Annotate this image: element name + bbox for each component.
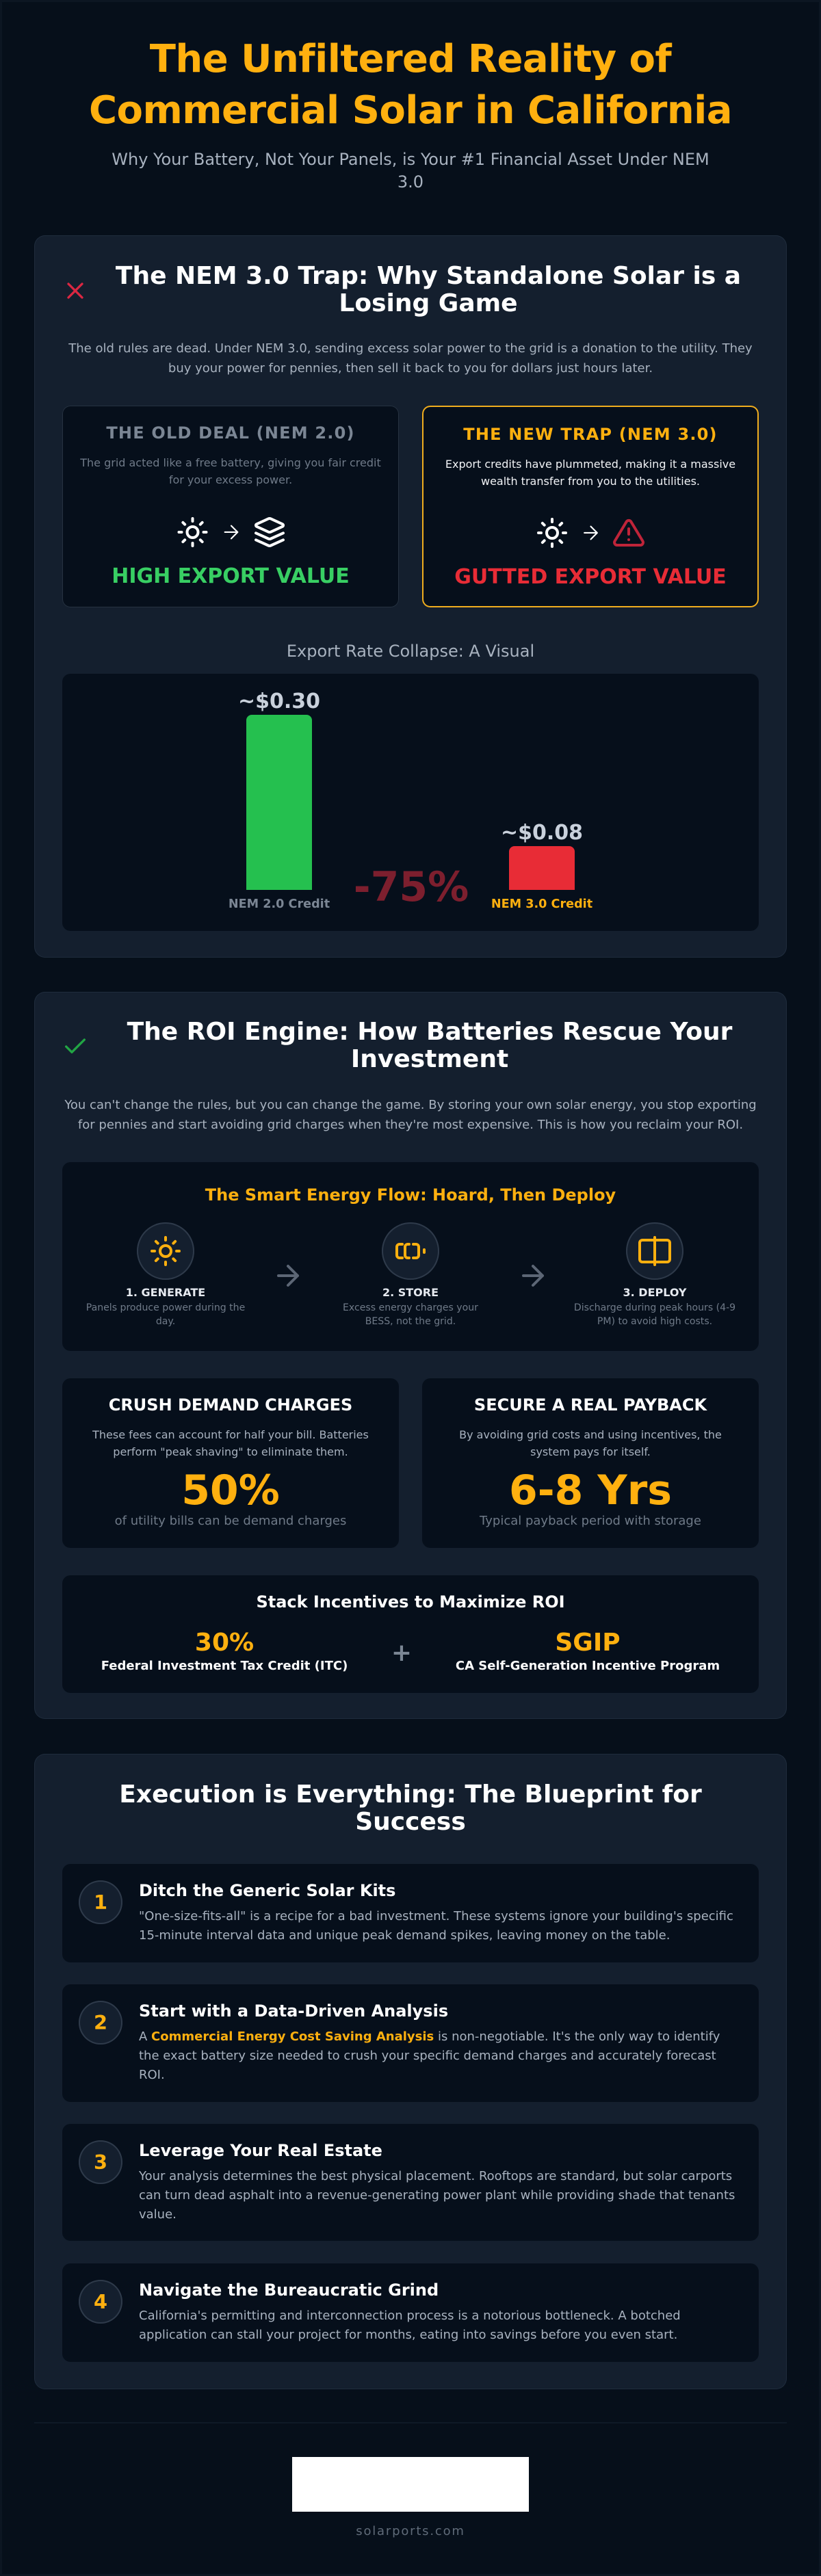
step text: value. (139, 2207, 177, 2222)
card title: CRUSH DEMAND CHARGES (109, 1395, 352, 1415)
step 4 (62, 2263, 759, 2362)
card title: THE OLD DEAL (NEM 2.0) (106, 423, 355, 443)
card text: for your excess power. (169, 473, 292, 486)
step text: Your analysis determines the best physical placement. Rooftops are standard, but solar carports (139, 2169, 732, 2183)
intro text: buy your power for pennies, then sell it back to you for dollars just hours later. (168, 361, 653, 375)
number badge: 4 (94, 2290, 107, 2313)
panel: smart energy flow (62, 1162, 759, 1351)
step text: store: BESS, not the grid. (365, 1316, 456, 1327)
step text (139, 2169, 735, 2222)
step title: deploy: 3. DEPLOY (623, 1286, 686, 1299)
flow title: The Smart Energy Flow: Hoard, Then Deploy (205, 1185, 616, 1205)
step text: deploy: PM) to avoid high costs. (597, 1316, 712, 1327)
card text (80, 456, 381, 486)
step title: generate: 1. GENERATE (126, 1286, 205, 1299)
footer logo block (292, 2457, 529, 2512)
stat note: Typical payback period with storage (480, 1514, 701, 1528)
heading: execution: Execution is Everything: The Blueprint for (119, 1780, 702, 1809)
step text (139, 2309, 681, 2342)
panel: stack incentives (62, 1575, 759, 1693)
step title: Navigate the Bureaucratic Grind (139, 2281, 439, 2300)
step 3 (62, 2124, 759, 2241)
intro text (68, 341, 753, 375)
bar: NEM 2.0 (246, 715, 312, 890)
plus sign: + (391, 1639, 412, 1667)
value label: GUTTED EXPORT VALUE (454, 565, 727, 589)
icon: store battery (382, 1222, 439, 1280)
step text: application can stall your project for months, eating into savings before you even start. (139, 2328, 677, 2342)
step 2 (62, 1984, 759, 2102)
title: The Unfiltered Reality of (150, 37, 671, 81)
card text (459, 1428, 722, 1458)
step title: Ditch the Generic Solar Kits (139, 1881, 395, 1900)
heading: ROI engine (127, 1018, 732, 1073)
panel: the NEM 3.0 trap (34, 235, 787, 958)
subtitle: 3.0 (398, 172, 423, 192)
step text: generate: day. (156, 1316, 175, 1327)
bar value: NEM 2.0: ~$0.30 (238, 689, 320, 713)
bar: NEM 3.0 (509, 846, 575, 890)
step title: store: 2. STORE (382, 1286, 439, 1299)
step title: Leverage Your Real Estate (139, 2141, 382, 2160)
step text: deploy (574, 1302, 735, 1327)
stat note: of utility bills can be demand charges (115, 1514, 346, 1528)
chart heading: Export Rate Collapse: A Visual (287, 642, 534, 661)
card text: These fees can account for half your bill. Batteries (92, 1428, 369, 1441)
intro text: for pennies and start avoiding grid charges when they're most expensive. This is how you reclaim your ROI. (78, 1118, 743, 1131)
stat: 6-8 years: 6-8 Yrs (509, 1467, 672, 1514)
step text: store (343, 1302, 478, 1327)
heading: execution (119, 1780, 702, 1836)
step text: generate: Panels produce power during the (86, 1302, 245, 1313)
title (89, 37, 732, 133)
incentive label: ITC: Federal Investment Tax Credit (ITC) (101, 1659, 348, 1673)
card text: wealth transfer from you to the utilities. (481, 475, 700, 487)
icon row: sun to layers (178, 517, 285, 547)
incentives title: Stack Incentives to Maximize ROI (256, 1592, 565, 1612)
icon: green check (64, 1038, 86, 1053)
card: crush demand charges (62, 1378, 399, 1548)
card text (445, 458, 735, 487)
number badge (79, 2001, 122, 2045)
icon: deploy (626, 1222, 683, 1280)
bar value: NEM 3.0: ~$0.08 (501, 821, 583, 845)
step text: can turn dead asphalt into a revenue-generating power plant while providing shade that tenants (139, 2188, 735, 2203)
step text (139, 2029, 720, 2082)
bar label: NEM 3.0: NEM 3.0 Credit (491, 897, 592, 911)
bar chart: export rate collapse (62, 674, 759, 931)
panel: execution blueprint (34, 1754, 787, 2389)
heading: ROI engine: The ROI Engine: How Batteries Rescue Your (127, 1018, 732, 1046)
stat: 50 percent: 50% (181, 1467, 280, 1514)
step text: California's permitting and interconnection process is a notorious bottleneck. A botched (139, 2309, 681, 2323)
callout: minus 75 percent: -75% (354, 863, 469, 911)
card text: By avoiding grid costs and using incentives, the (459, 1428, 722, 1441)
card text: system pays for itself. (530, 1445, 651, 1458)
card: secure a real payback (422, 1378, 759, 1548)
number badge (79, 1880, 122, 1924)
card text: The grid acted like a free battery, giving you fair credit (80, 456, 381, 469)
intro text: The old rules are dead. Under NEM 3.0, sending excess solar power to the grid is a donation to the utility. They (68, 341, 753, 356)
intro text: You can't change the rules, but you can change the game. By storing your own solar energy, you stop exporting (64, 1098, 757, 1112)
step text: store: Excess energy charges your (343, 1302, 478, 1313)
icon row: sun to warning (537, 518, 644, 548)
step text: A Commercial Energy Cost Saving Analysis is non-negotiable. It's the only way to identify (139, 2029, 720, 2044)
card text: perform "peak shaving" to eliminate them. (113, 1445, 348, 1458)
icon: red x (67, 282, 83, 299)
title: Commercial Solar in California (89, 88, 732, 133)
subtitle (112, 150, 709, 192)
subtitle: Why Your Battery, Not Your Panels, is Your #1 Financial Asset Under NEM (112, 150, 709, 169)
step text: 15-minute interval data and unique peak demand spikes, leaving money on the table. (139, 1928, 670, 1943)
footer url: solarports.com (356, 2524, 465, 2538)
card: new trap (422, 406, 759, 607)
step 1 (62, 1864, 759, 1962)
arrow: store to deploy (522, 1264, 545, 1287)
number badge: 2 (94, 2011, 107, 2034)
number badge: 3 (94, 2151, 107, 2174)
incentive value: SGIP: SGIP (555, 1629, 621, 1657)
incentive label: SGIP: CA Self-Generation Incentive Program (456, 1659, 720, 1673)
step text: ROI. (139, 2068, 165, 2082)
step text (139, 1909, 733, 1943)
step text: the exact battery size needed to crush your specific demand charges and accurately forecast (139, 2049, 716, 2063)
icon: generate sun (137, 1222, 194, 1280)
heading: execution: Success (355, 1808, 466, 1836)
card text (92, 1428, 369, 1458)
heading: ROI engine: Investment (351, 1045, 508, 1073)
number badge (79, 2140, 122, 2184)
intro text (64, 1098, 757, 1131)
step text: deploy: Discharge during peak hours (4-9 (574, 1302, 735, 1313)
heading: NEM 3.0 trap: Losing Game (339, 289, 518, 317)
number badge (79, 2280, 122, 2324)
step text: generate (86, 1302, 245, 1327)
arrow: generate to store (277, 1264, 300, 1287)
heading: NEM 3.0 trap (116, 262, 741, 317)
card text: Export credits have plummeted, making it a massive (445, 458, 735, 471)
heading: NEM 3.0 trap: The NEM 3.0 Trap: Why Standalone Solar is a (116, 262, 741, 290)
card title: SECURE A REAL PAYBACK (474, 1395, 707, 1415)
step text: "One-size-fits-all" is a recipe for a bad investment. These systems ignore your building's specific (139, 1909, 733, 1923)
number badge: 1 (94, 1891, 107, 1914)
bar label: NEM 2.0: NEM 2.0 Credit (229, 897, 330, 911)
card title: THE NEW TRAP (NEM 3.0) (463, 425, 718, 444)
panel: the ROI engine (34, 992, 787, 1719)
incentive value: ITC: 30% (195, 1629, 254, 1657)
step title: Start with a Data-Driven Analysis (139, 2001, 448, 2021)
card: old deal (62, 406, 399, 607)
value label: HIGH EXPORT VALUE (112, 564, 350, 588)
